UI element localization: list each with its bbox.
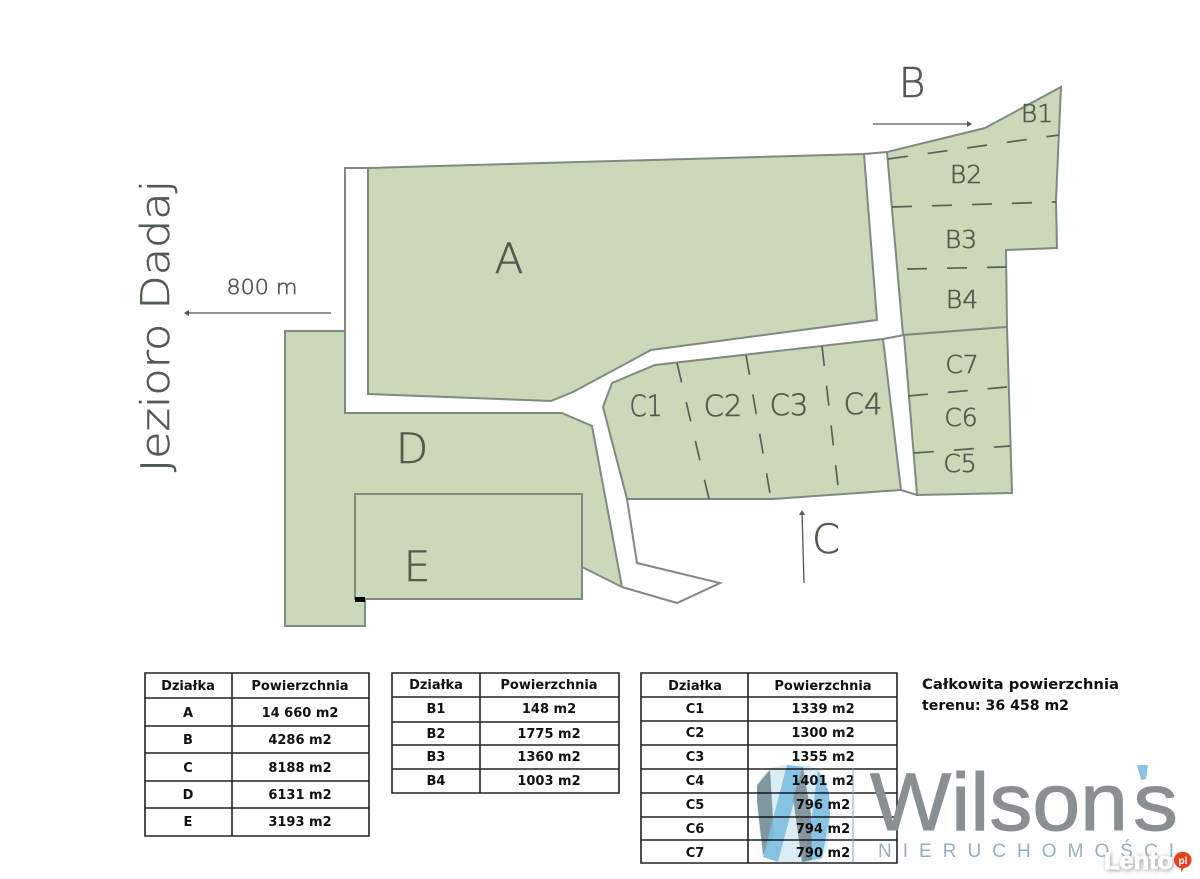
table: C plots: 1339 m2	[791, 702, 855, 717]
table: C plots: C6	[686, 822, 704, 837]
plot labels: C2	[704, 389, 742, 423]
total area note: Całkowita powierzchnia	[922, 677, 1119, 693]
table: C plots: Powierzchnia	[774, 679, 872, 694]
wordmark: Wilson	[870, 757, 1128, 848]
table: C plots: C7	[686, 846, 704, 861]
table: C plots: C4	[686, 774, 704, 789]
table: B plots: 1775 m2	[517, 727, 581, 742]
table: C plots: 1401 m2	[791, 774, 855, 789]
site map	[285, 59, 1061, 626]
badge	[1174, 852, 1192, 872]
plots C1-C4	[603, 339, 901, 499]
table: main plots: 3193 m2	[268, 815, 332, 830]
plot A	[368, 154, 877, 401]
table: main plots: Powierzchnia	[251, 679, 349, 694]
table: B plots: B3	[427, 750, 445, 765]
table: C plots: 1300 m2	[791, 726, 855, 741]
plot labels: B2	[950, 160, 982, 189]
icon: W mark	[757, 765, 830, 862]
arrow: lake distance	[184, 310, 331, 316]
table: C plots: C3	[686, 750, 704, 765]
table: main plots: 14 660 m2	[262, 706, 338, 721]
watermark: Lento: Lento	[1104, 848, 1173, 875]
plots B1-B4	[887, 87, 1061, 335]
watermark: Lento: pl	[1179, 856, 1188, 867]
plot D	[285, 331, 622, 626]
table: main plots: 4286 m2	[268, 733, 332, 748]
table: B plots: B4	[427, 774, 445, 789]
table: C plots: Działka	[668, 679, 722, 694]
plot labels: B1	[1021, 99, 1053, 128]
plot labels: C1	[630, 389, 662, 423]
table: B plots: B2	[427, 727, 445, 742]
marker: black corner	[355, 597, 365, 602]
plot labels: C3	[770, 388, 808, 422]
plot labels: C4	[844, 387, 882, 421]
table: C plots: 790 m2	[796, 846, 850, 861]
arrow: C	[799, 510, 805, 583]
table: main plots	[145, 673, 369, 836]
table: B plots	[392, 673, 619, 793]
plots C5-C7	[904, 327, 1012, 495]
plot labels: A	[495, 234, 523, 283]
table: main plots: C	[183, 761, 193, 776]
table: B plots: 1360 m2	[517, 750, 581, 765]
wordmark: s	[1133, 757, 1178, 848]
plot labels: B3	[945, 225, 977, 254]
plot labels: E	[404, 542, 430, 591]
plot labels: C7	[945, 350, 979, 379]
table: main plots: A	[183, 706, 193, 721]
vertical rule	[852, 768, 854, 862]
table: C plots: 796 m2	[796, 798, 850, 813]
plot labels: C6	[944, 403, 978, 432]
table: B plots: Powierzchnia	[500, 678, 598, 693]
table: main plots: Działka	[161, 679, 215, 694]
table: B plots: B1	[427, 702, 445, 717]
table: B plots: Działka	[409, 678, 463, 693]
distance label: 800 m	[226, 275, 298, 299]
tagline: NIERUCHOMOŚCI	[878, 840, 1174, 862]
table: main plots: 6131 m2	[268, 788, 332, 803]
plot labels	[396, 59, 1053, 591]
plot E	[355, 494, 582, 599]
logo: Wilson's Nieruchomości	[757, 757, 1178, 862]
table: main plots: 8188 m2	[268, 761, 332, 776]
plot labels: B4	[946, 285, 978, 314]
table: B plots: 148 m2	[522, 702, 576, 717]
plot labels: C5	[943, 449, 977, 478]
road outline	[345, 152, 917, 603]
total area note	[922, 677, 1119, 714]
plot labels: D	[396, 424, 428, 473]
table: main plots: B	[183, 733, 193, 748]
lake label: Jezioro Dadaj	[134, 180, 179, 472]
plot divider lines	[677, 135, 1059, 499]
apostrophe accent	[1137, 765, 1148, 780]
table: C plots: C5	[686, 798, 704, 813]
table: C plots: 794 m2	[796, 822, 850, 837]
table: C plots	[641, 673, 897, 863]
table: C plots: C2	[686, 726, 704, 741]
table: B plots: 1003 m2	[517, 774, 581, 789]
table: C plots: C1	[686, 702, 704, 717]
table: main plots: E	[184, 815, 192, 830]
arrow: B	[873, 121, 972, 127]
plot labels: B	[899, 59, 925, 107]
plot labels: C	[812, 517, 840, 563]
table: main plots: D	[183, 788, 194, 803]
total area note: terenu: 36 458 m2	[922, 698, 1069, 714]
table: C plots: 1355 m2	[791, 750, 855, 765]
